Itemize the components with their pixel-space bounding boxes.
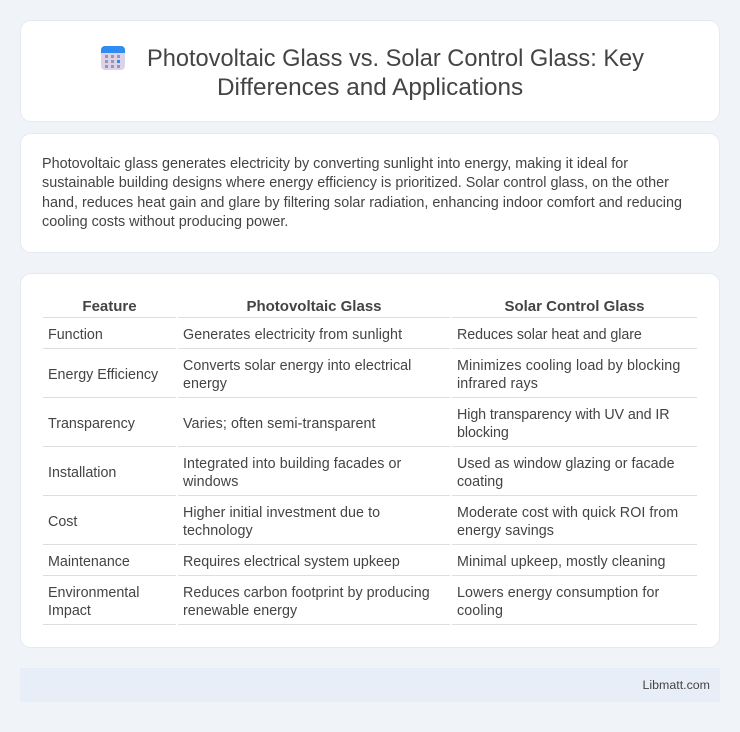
row: energy efficiency: energy [183, 376, 227, 392]
panel: intro paragraph [20, 133, 720, 253]
text block: intro: sustainable building designs where energy efficiency is prioritized. Solar control glass, on the other [42, 175, 669, 191]
row: maintenance [43, 554, 697, 576]
table header: Solar Control Glass [504, 298, 645, 315]
row: environmental impact: Reduces carbon footprint by producing [183, 585, 430, 601]
footer [20, 668, 720, 702]
footer text: Libmatt.com [643, 678, 710, 692]
row: environmental impact: Impact [48, 603, 91, 619]
row: function: Generates electricity from sunlight [183, 327, 402, 343]
row: environmental impact: Lowers energy consumption for [457, 585, 659, 601]
row: energy efficiency: Converts solar energy into electrical [183, 358, 411, 374]
table header [43, 298, 697, 318]
title [147, 46, 644, 101]
panel: title card [20, 20, 720, 122]
row: cost: Cost [48, 514, 77, 530]
row: maintenance: Maintenance [48, 554, 130, 570]
row: function: Function [48, 327, 103, 343]
row: energy efficiency [43, 358, 697, 398]
text block: intro [42, 156, 682, 230]
row: environmental impact [43, 585, 697, 625]
row: maintenance: Minimal upkeep, mostly cleaning [457, 554, 665, 570]
row: installation: Installation [48, 465, 116, 481]
title: Differences and Applications [217, 74, 523, 101]
row: function [43, 327, 697, 349]
title: Photovoltaic Glass vs. Solar Control Glass: Key [147, 46, 644, 72]
panel: comparison table [20, 273, 720, 648]
row: environmental impact: renewable energy [183, 603, 297, 619]
table header: Feature [82, 298, 137, 315]
row: energy efficiency: Minimizes cooling load by blocking [457, 358, 680, 374]
row: installation: windows [183, 474, 238, 490]
table header: Photovoltaic Glass [246, 298, 382, 315]
row: maintenance: Requires electrical system upkeep [183, 554, 400, 570]
row: cost: Moderate cost with quick ROI from [457, 505, 678, 521]
row: energy efficiency: Energy Efficiency [48, 367, 158, 383]
row: cost: energy savings [457, 523, 554, 539]
text block: intro: cooling costs without producing power. [42, 214, 288, 230]
icon: calendar grid [101, 46, 125, 70]
row: transparency: Varies; often semi-transparent [183, 416, 376, 432]
row: function: Reduces solar heat and glare [457, 327, 642, 343]
row: cost: Higher initial investment due to [183, 505, 380, 521]
row: installation: coating [457, 474, 503, 490]
row: transparency: Transparency [48, 416, 135, 432]
row: installation [43, 456, 697, 496]
row: installation: Integrated into building facades or [183, 456, 401, 472]
row: transparency: High transparency with UV and IR [457, 407, 669, 423]
text block: intro: Photovoltaic glass generates electricity by converting sunlight into energy, making it ideal for [42, 156, 628, 172]
row: transparency [43, 407, 697, 447]
row: transparency: blocking [457, 425, 509, 441]
row: cost: technology [183, 523, 253, 539]
row: installation: Used as window glazing or facade [457, 456, 675, 472]
row: cost [43, 505, 697, 545]
row: environmental impact: cooling [457, 603, 503, 619]
row: environmental impact: Environmental [48, 585, 139, 601]
text block: intro: hand, reduces heat gain and glare by filtering solar radiation, enhancing indoor comfort and reducing [42, 195, 682, 211]
row: energy efficiency: infrared rays [457, 376, 538, 392]
